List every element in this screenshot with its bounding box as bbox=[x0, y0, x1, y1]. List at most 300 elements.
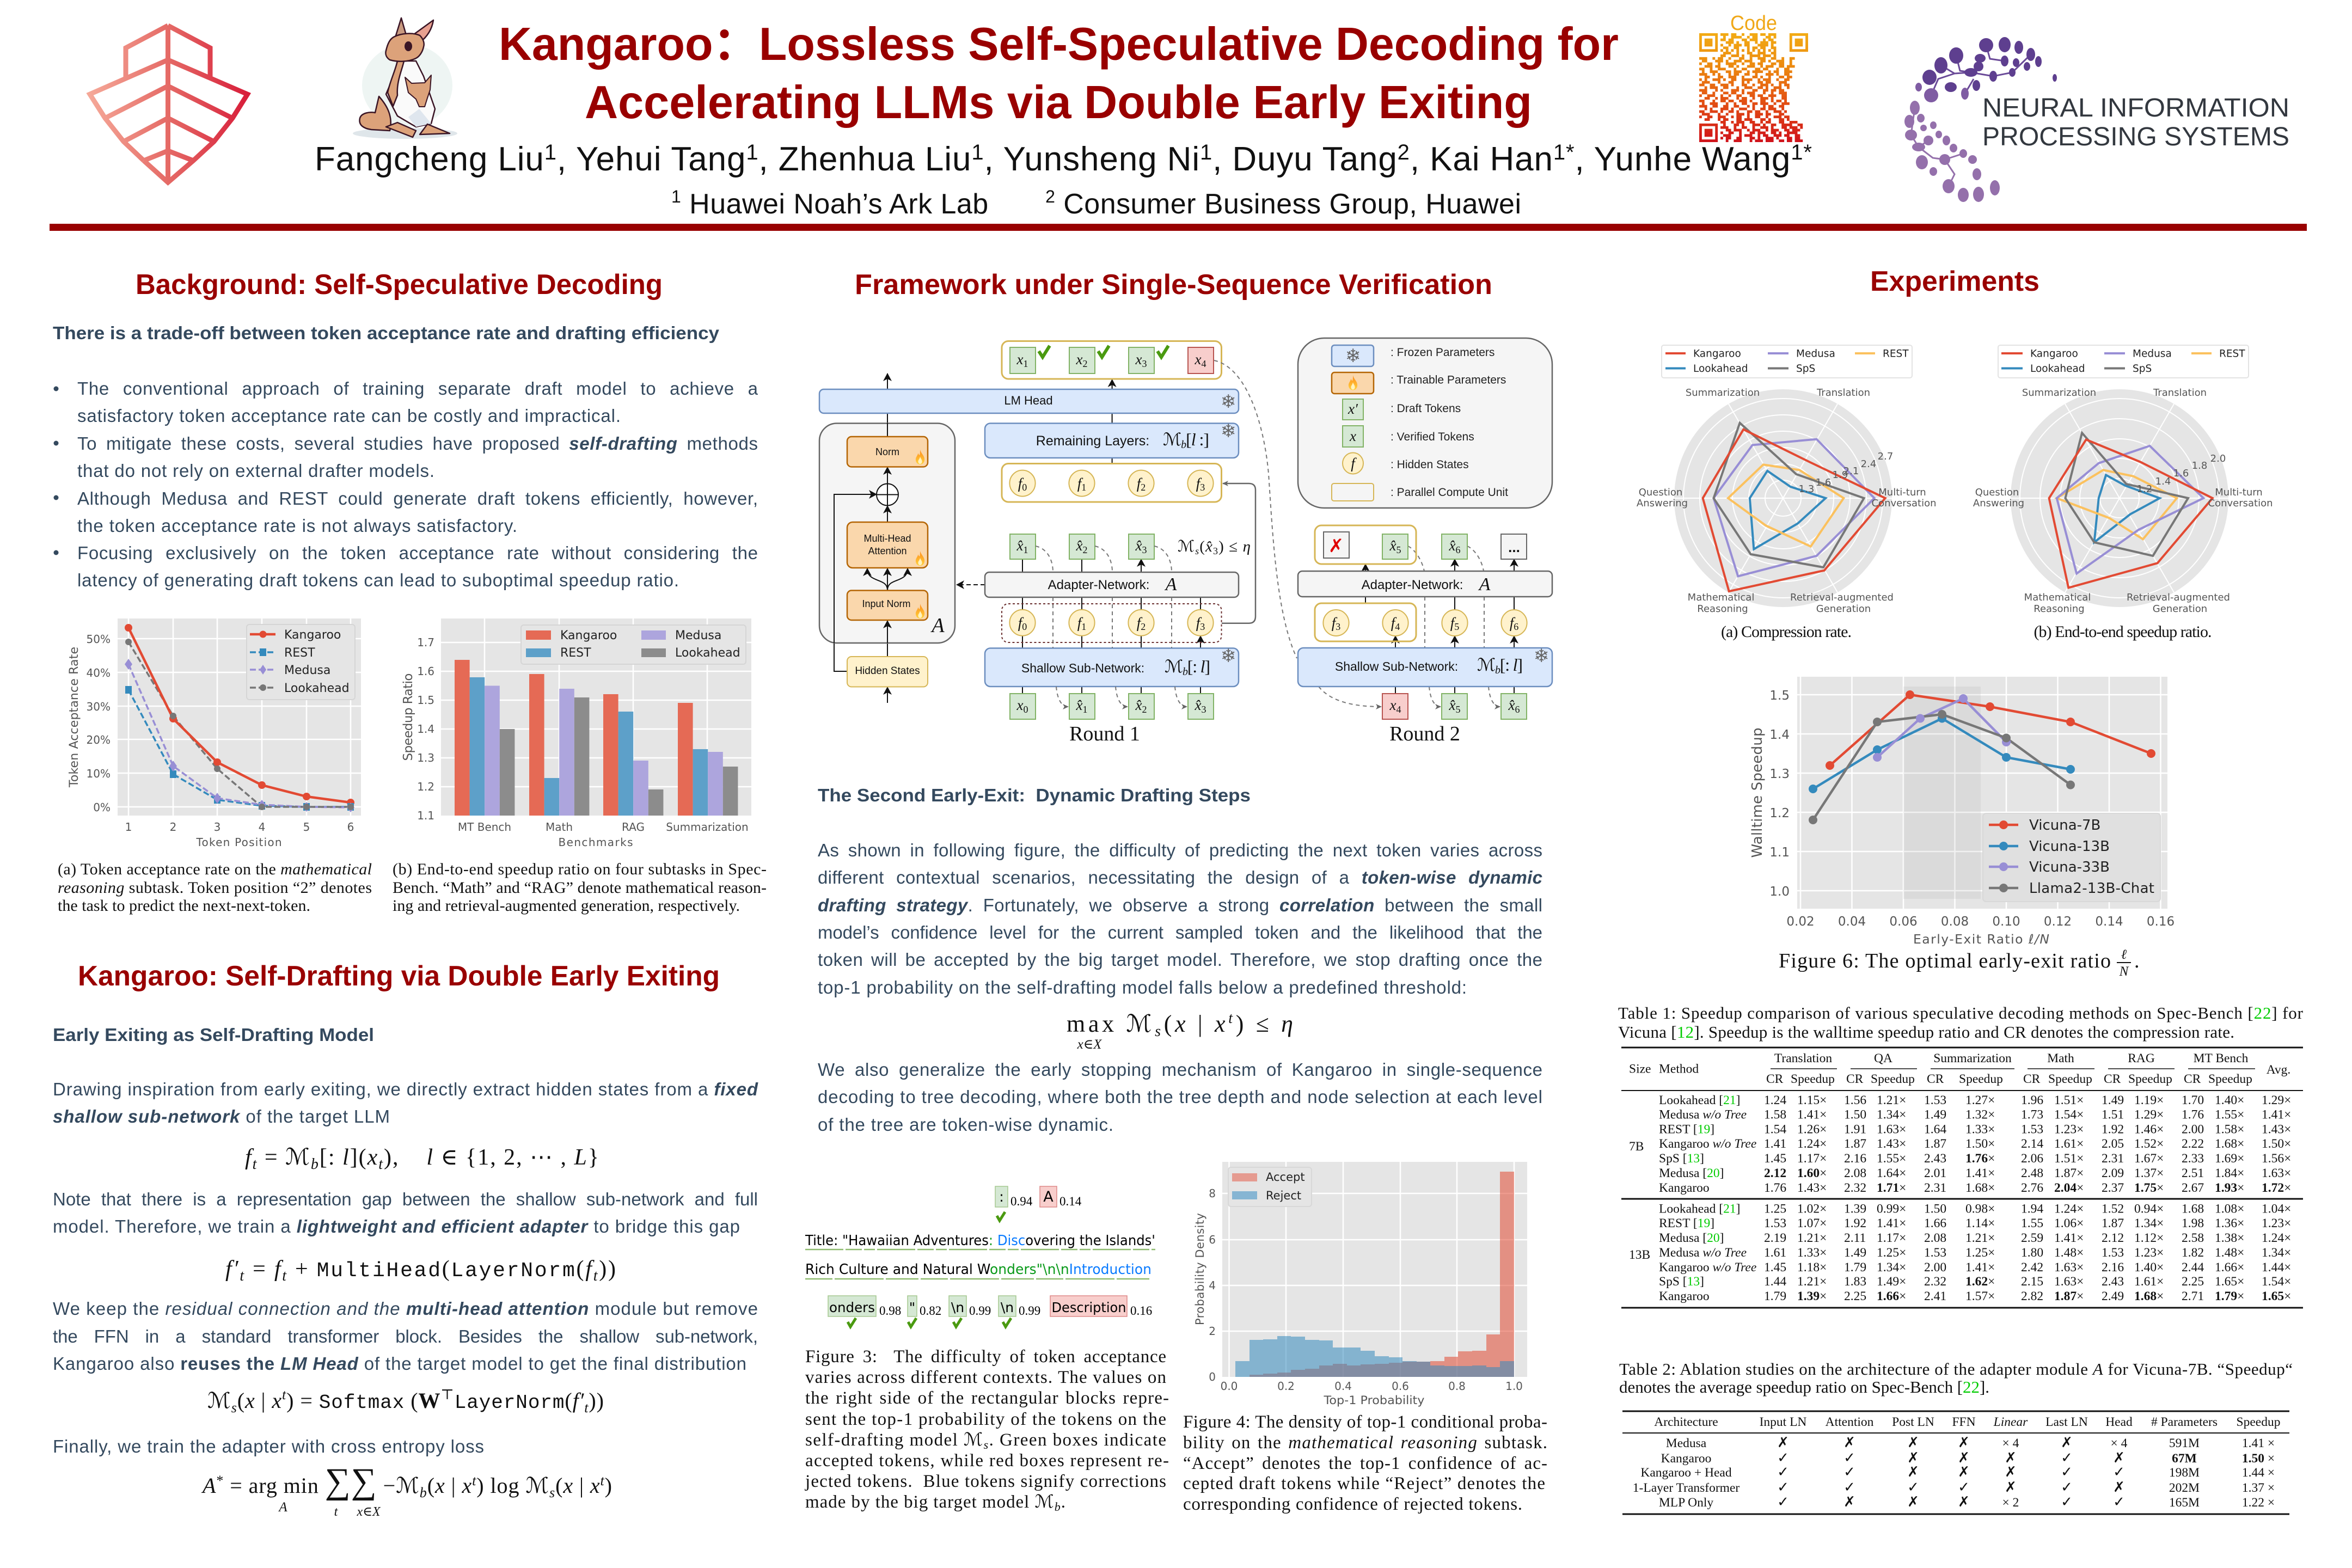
shallow sub-network round 1: ℳ bbox=[1165, 657, 1183, 676]
table 1 rows: 13B: 1.39 bbox=[1844, 1202, 1866, 1216]
equation: final distribution: (f′ bbox=[565, 1388, 584, 1413]
radar chart: speedup ratio: 2.0 bbox=[2210, 453, 2226, 464]
text block: residual connection: Kangaroo also reuses the LM Head of the target model to get the final distribution bbox=[53, 1353, 746, 1374]
equation: shallow features: = ℳ bbox=[258, 1145, 310, 1170]
legend panel: : Hidden States bbox=[1391, 458, 1469, 471]
figure 3: token blocks bbox=[805, 1186, 1155, 1327]
table 1 rows: 13B: 2.43 bbox=[2102, 1275, 2124, 1289]
legend panel: : Frozen Parameters bbox=[1391, 346, 1494, 359]
equation: shallow features: ), bbox=[384, 1145, 425, 1170]
table 1 rows: 7B: 1.76 bbox=[2182, 1107, 2204, 1122]
verified tokens: x bbox=[1136, 351, 1142, 367]
radar chart: compression rate: Translation bbox=[1816, 387, 1870, 399]
NeurIPS wordmark: PROCESSING SYSTEMS bbox=[1982, 122, 2289, 151]
table 1 rows: 13B: Medusa [20] bbox=[1659, 1231, 1724, 1245]
radar chart: compression rate: Mathematical bbox=[1688, 592, 1754, 603]
table 1 rows: 7B: Kangaroo bbox=[1659, 1181, 1710, 1195]
legend: REST bbox=[560, 646, 591, 660]
legend panel: ❄ bbox=[1345, 345, 1361, 367]
hidden states row bottom: 1 bbox=[1081, 621, 1086, 632]
multi-head attention block: Multi-Head bbox=[863, 533, 911, 544]
legend panel: : Verified Tokens bbox=[1391, 431, 1474, 443]
table 1 rows: 13B: 1.48× bbox=[2215, 1246, 2244, 1260]
table 1 rows: 7B: Kangaroo w/o Tree bbox=[1659, 1137, 1756, 1151]
equation: final distribution: ) = bbox=[286, 1388, 318, 1413]
line chart: figure 6: 0.06 bbox=[1889, 915, 1918, 929]
legend panel: x′ bbox=[1347, 401, 1358, 417]
text block: dynamic drafting: drafting strategy. Fortunately, we observe a strong correlation between the small bbox=[818, 895, 1542, 915]
table 1 header: CR bbox=[2104, 1072, 2121, 1086]
verified tokens: x bbox=[1195, 351, 1201, 367]
table 2 rows: ✓ bbox=[1843, 1450, 1855, 1466]
histogram: figure 4 bbox=[1193, 1162, 1527, 1407]
table 2 header: Input LN bbox=[1760, 1415, 1806, 1429]
table 2 rows: ✗ bbox=[1907, 1450, 1919, 1466]
table 1 header: CR bbox=[1846, 1072, 1864, 1086]
table 1 rows: 7B: 2.08 bbox=[1844, 1166, 1866, 1180]
text block: tree decoding: decoding to tree decoding, where both the tree depth and node selection at each level bbox=[818, 1087, 1542, 1107]
equation: adapter: f bbox=[274, 1257, 284, 1282]
bar chart: end-to-end speedup ratio bbox=[401, 618, 751, 849]
verified tokens: x bbox=[1076, 351, 1082, 367]
equation: shallow features: [: bbox=[320, 1145, 341, 1170]
table 1 rows: 7B: 2.00 bbox=[2182, 1123, 2204, 1137]
table 1 rows: 13B: 1.02× bbox=[1797, 1202, 1827, 1216]
legend panel bbox=[1298, 338, 1552, 508]
table 1 rows: 7B: 1.41× bbox=[2262, 1107, 2291, 1122]
table 1 header: CR bbox=[1927, 1072, 1944, 1086]
radar chart: compression rate: Answering bbox=[1637, 498, 1688, 509]
line chart: figure 6: 0.08 bbox=[1941, 915, 1969, 929]
bar chart: end-to-end speedup ratio: Benchmarks bbox=[559, 836, 633, 849]
table 1 rows: 13B: REST [19] bbox=[1659, 1216, 1714, 1230]
bar chart: end-to-end speedup ratio: 1.1 bbox=[417, 809, 434, 822]
line chart: token acceptance rate: 20% bbox=[87, 733, 111, 746]
table 1 rows: 13B: 1.52 bbox=[2102, 1202, 2124, 1216]
table 2 rows: ✗ bbox=[2005, 1450, 2017, 1466]
table 1 rows: 13B: Medusa w/o Tree bbox=[1659, 1246, 1747, 1260]
equation: final distribution: s bbox=[231, 1400, 237, 1416]
histogram: figure 4: 4 bbox=[1209, 1279, 1216, 1292]
table 1 rows: 7B: 1.71× bbox=[1877, 1181, 1906, 1195]
table 1 rows: 13B: 1.87 bbox=[2102, 1216, 2124, 1230]
table 1 header: Speedup bbox=[2208, 1072, 2252, 1086]
equation: cross entropy: t bbox=[334, 1505, 339, 1519]
table 1 rows: 13B: 0.99× bbox=[1877, 1202, 1906, 1216]
table 1 rows: 7B: Lookahead [21] bbox=[1659, 1093, 1740, 1107]
table 1 rows: 13B: 1.82 bbox=[2182, 1246, 2204, 1260]
threshold label: ) ≤ bbox=[1218, 538, 1242, 555]
legend: Lookahead bbox=[1693, 363, 1748, 375]
table 1 rows: 7B: 1.33× bbox=[1965, 1123, 1995, 1137]
table 1 rows: 7B: 1.56 bbox=[1844, 1093, 1866, 1107]
radar chart: compression rate: 1.6 bbox=[1816, 477, 1831, 488]
table 1 rows: 7B: 1.49 bbox=[1924, 1107, 1946, 1122]
table 1 rows: 7B: 2.22 bbox=[2182, 1137, 2204, 1151]
panel: background bbox=[53, 269, 767, 915]
caption: figure 3: the right side of the rectangular blocks repre- bbox=[805, 1388, 1169, 1408]
remaining layers: l :] bbox=[1191, 430, 1209, 449]
histogram: figure 4: 0.0 bbox=[1221, 1380, 1238, 1393]
equation: final distribution: t bbox=[584, 1400, 589, 1416]
equation: cross entropy: t bbox=[601, 1473, 605, 1489]
hidden states row top: f bbox=[1137, 475, 1141, 492]
top token row: : bbox=[999, 1189, 1004, 1205]
table 2 rows: ✗ bbox=[2113, 1450, 2125, 1466]
line chart: figure 6: 1.5 bbox=[1769, 689, 1790, 703]
table 1 rows: 13B: 1.68× bbox=[2134, 1289, 2164, 1303]
hidden states row bottom: 3 bbox=[1200, 621, 1205, 632]
table 1 rows: 7B: SpS [13] bbox=[1659, 1152, 1704, 1166]
histogram: figure 4: 0 bbox=[1209, 1370, 1216, 1383]
table 1 rows: 13B: 2.12 bbox=[2102, 1231, 2124, 1245]
legend: Medusa bbox=[675, 629, 721, 642]
radar chart: speedup ratio: Multi-turn bbox=[2215, 487, 2263, 498]
legend panel: f bbox=[1351, 455, 1357, 471]
round 2 hidden states: 3 bbox=[1336, 621, 1340, 632]
table 1 rows: 13B: 1.14× bbox=[1965, 1216, 1995, 1230]
table 1 rows: 13B: Kangaroo bbox=[1659, 1289, 1710, 1303]
caption: figure 3: made by the big target model ℳ bbox=[805, 1492, 1054, 1512]
table 1 header: Math bbox=[2047, 1051, 2074, 1065]
legend bbox=[1983, 813, 2160, 902]
line chart: figure 6: 1.3 bbox=[1769, 767, 1790, 781]
radar chart: compression rate: Retrieval-augmented bbox=[1790, 592, 1894, 603]
table 1 rows: 7B: 1.52× bbox=[2134, 1137, 2164, 1151]
legend panel: x bbox=[1349, 428, 1356, 444]
text block: tree decoding: We also generalize the early stopping mechanism of Kangaroo in single-sequence bbox=[818, 1059, 1542, 1080]
equation: cross entropy: A bbox=[278, 1500, 287, 1515]
input tokens round 1 bbox=[1010, 694, 1214, 719]
threshold label: η bbox=[1243, 538, 1251, 555]
table 1 rows: 7B: 1.72× bbox=[2262, 1181, 2291, 1195]
table 1 rows: 13B: 2.16 bbox=[2102, 1260, 2124, 1275]
draft tokens row: 2 bbox=[1082, 544, 1087, 555]
table 1 rows: 13B: 1.18× bbox=[1797, 1260, 1827, 1275]
table 1 rows: 13B: 1.53 bbox=[1924, 1246, 1946, 1260]
table 1 rows: 7B: 1.41 bbox=[1764, 1137, 1786, 1151]
table 1 rows: 7B: 1.41× bbox=[1965, 1166, 1995, 1180]
table 2 rows: ✗ bbox=[2061, 1435, 2073, 1451]
generated text lines bbox=[805, 1233, 1155, 1279]
authors: , Yunhe Wang bbox=[1575, 140, 1790, 178]
radar chart: compression rate: Reasoning bbox=[1697, 603, 1748, 615]
caption: figure 6: N bbox=[2119, 964, 2129, 979]
remaining layers bbox=[985, 420, 1239, 458]
table 1 rows: 7B: 1.46× bbox=[2134, 1123, 2164, 1137]
table 1 header bbox=[1629, 1051, 2290, 1086]
legend: Medusa bbox=[1796, 348, 1835, 359]
line chart: token acceptance rate: 4 bbox=[259, 820, 265, 834]
radar chart: speedup ratio: Translation bbox=[2153, 387, 2207, 399]
table 1 rows: 7B: 1.40× bbox=[2215, 1093, 2244, 1107]
table 2 header: FFN bbox=[1952, 1415, 1976, 1429]
table 1 rows: 7B: 2.51 bbox=[2182, 1166, 2204, 1180]
radar chart: speedup ratio: Reasoning bbox=[2033, 603, 2085, 615]
top token row bbox=[995, 1186, 1082, 1221]
table 2 rows: 1.22 × bbox=[2242, 1496, 2275, 1510]
table 1 rows: 7B: 1.76× bbox=[1965, 1152, 1995, 1166]
table 1 rows: 7B: 1.64× bbox=[1877, 1166, 1906, 1180]
radar chart: compression rate: 1.3 bbox=[1799, 483, 1814, 495]
equation: final distribution: ⊤ bbox=[440, 1387, 454, 1402]
radar chart: speedup ratio: 1.8 bbox=[2192, 460, 2207, 471]
table 1 rows: 13B: 1.08× bbox=[2215, 1202, 2244, 1216]
input tokens round 2: 6 bbox=[1515, 704, 1520, 715]
caption: figure 4: corresponding confidence of rejected tokens. bbox=[1183, 1494, 1522, 1514]
legend: Kangaroo bbox=[1693, 348, 1741, 359]
legend: Lookahead bbox=[284, 682, 350, 695]
table 1 rows: 7B: 1.93× bbox=[2215, 1181, 2244, 1195]
line chart: figure 6: 0.12 bbox=[2044, 915, 2072, 929]
table 1 rows: 7B: 2.05 bbox=[2102, 1137, 2124, 1151]
equation: adapter: t bbox=[240, 1267, 244, 1284]
hidden states row bottom: f bbox=[1196, 615, 1200, 631]
shallow sub-network round 2 bbox=[1298, 645, 1552, 687]
table 1 rows: 13B: 2.08 bbox=[1924, 1231, 1946, 1245]
authors: , Yehui Tang bbox=[557, 140, 746, 178]
shallow sub-network round 1 bbox=[985, 645, 1239, 687]
radar chart: speedup ratio: Summarization bbox=[2022, 387, 2096, 399]
text block: bullet list: Although Medusa and REST could generate draft tokens efficiently, however, bbox=[77, 488, 758, 509]
verified tokens: 1 bbox=[1023, 358, 1028, 369]
hidden states input: Hidden States bbox=[855, 665, 920, 677]
table 1 rows: 7B: 2.76 bbox=[2021, 1181, 2043, 1195]
table 2 rows: ✓ bbox=[2061, 1450, 2073, 1466]
table 1 rows: 13B: 1.66× bbox=[1877, 1289, 1906, 1303]
table 2 rows: ✓ bbox=[2113, 1464, 2125, 1480]
equation: final distribution: ℳ bbox=[207, 1388, 231, 1413]
text block: tree decoding bbox=[818, 1059, 1542, 1135]
multi-head attention block bbox=[847, 522, 928, 568]
top token row: 0.14 bbox=[1059, 1195, 1082, 1208]
top token row: A bbox=[1043, 1189, 1054, 1205]
icon: conference leaf logo bbox=[90, 26, 247, 182]
equation: stopping criterion: s bbox=[1155, 1023, 1161, 1040]
table 2 rows bbox=[1633, 1435, 2275, 1510]
table 1 rows: 13B: 2.41 bbox=[1924, 1289, 1946, 1303]
legend: Lookahead bbox=[675, 646, 740, 660]
table 1 rows: 13B: 1.34× bbox=[2262, 1246, 2291, 1260]
line chart: token acceptance rate: 0% bbox=[93, 801, 111, 814]
radar chart: speedup ratio: Question bbox=[1975, 487, 2019, 498]
norm block: Norm bbox=[875, 446, 899, 457]
bottom token row: \n bbox=[1001, 1300, 1014, 1315]
caption: figure b: Bench. “Math” and “RAG” denote mathematical reason- bbox=[393, 879, 767, 897]
shallow sub-network round 2: b bbox=[1495, 664, 1500, 676]
histogram: figure 4: 0.2 bbox=[1277, 1380, 1295, 1393]
legend: REST bbox=[284, 646, 315, 660]
table 2 rows: 1-Layer Transformer bbox=[1633, 1481, 1739, 1495]
radar chart: compression rate: Summarization bbox=[1686, 387, 1760, 399]
equation: adapter: + bbox=[288, 1257, 315, 1282]
table 1 rows: 7B: 1.45 bbox=[1764, 1152, 1786, 1166]
equation: stopping criterion: max ℳ bbox=[1067, 1010, 1152, 1037]
shallow sub-network round 2: ❄ bbox=[1534, 645, 1549, 667]
table 1 rows: 7B: 2.04× bbox=[2054, 1181, 2084, 1195]
title: Kangaroo：Lossless Self-Speculative Decoding for bbox=[499, 19, 1619, 70]
authors: 1* bbox=[1791, 140, 1812, 164]
table 1 rows: 7B: 1.19× bbox=[2134, 1093, 2164, 1107]
equation: final distribution: )) bbox=[589, 1388, 604, 1413]
table 1 rows: 13B: 1.23× bbox=[2262, 1216, 2291, 1230]
table 1 rows: 13B: Kangaroo w/o Tree bbox=[1659, 1260, 1756, 1275]
table 1 rows: 13B: 1.79× bbox=[2215, 1289, 2244, 1303]
table 2 rows: ✓ bbox=[1777, 1464, 1789, 1480]
text block: drawing inspiration: Drawing inspiration from early exiting, we directly extract hidden states from a fixed bbox=[53, 1079, 758, 1099]
table 2 caption bbox=[1619, 1359, 2293, 1396]
legend panel: : Trainable Parameters bbox=[1391, 373, 1506, 387]
table 1 rows: 13B: 1.48× bbox=[2054, 1246, 2084, 1260]
bottom token row: 0.99 bbox=[969, 1304, 991, 1318]
authors: 1 bbox=[971, 140, 984, 164]
table 1 rows: 13B: 2.25 bbox=[2182, 1275, 2204, 1289]
caption: radar b: (b) End-to-end speedup ratio. bbox=[2034, 623, 2212, 641]
equation: adapter: = bbox=[246, 1257, 273, 1282]
NeurIPS wordmark bbox=[1982, 94, 2289, 151]
radar chart: speedup ratio: Conversation bbox=[2208, 498, 2273, 509]
table 2 rows: ✓ bbox=[1843, 1464, 1855, 1480]
round 2 output tokens: x̂ bbox=[1449, 537, 1455, 554]
table 1 rows: 13B: 2.49 bbox=[2102, 1289, 2124, 1303]
table 1 rows: 7B: 1.43× bbox=[1877, 1137, 1906, 1151]
histogram: figure 4: 0.8 bbox=[1448, 1380, 1466, 1393]
caption: figure 6: . bbox=[2134, 950, 2140, 972]
line chart: figure 6 bbox=[1749, 677, 2175, 947]
table 1 rows: 7B: 1.58 bbox=[1764, 1107, 1786, 1122]
table 1 caption: Vicuna [12]. Speedup is the walltime speedup ratio and CR denotes the compression rate. bbox=[1618, 1022, 2234, 1042]
table 2 rows: ✗ bbox=[2005, 1464, 2017, 1480]
table 2 bbox=[1622, 1411, 2289, 1514]
table 2 rows: ✓ bbox=[1777, 1494, 1789, 1510]
equation: adapter: f′ bbox=[225, 1257, 238, 1282]
table 2 rows: ✓ bbox=[1777, 1479, 1789, 1496]
line chart: figure 6: 0.14 bbox=[2095, 915, 2123, 929]
bottom token row: 0.82 bbox=[920, 1304, 941, 1318]
legend bbox=[1998, 345, 2249, 378]
table 2 rows: ✓ bbox=[1958, 1479, 1970, 1496]
radar chart: speedup ratio: Mathematical bbox=[2024, 592, 2091, 603]
table 1 header: CR bbox=[2023, 1072, 2041, 1086]
caption: figure 3: . bbox=[1061, 1492, 1065, 1512]
caption: radar a: (a) Compression rate. bbox=[1721, 623, 1852, 641]
hidden states row bottom: 0 bbox=[1022, 621, 1027, 632]
line chart: token acceptance rate: 6 bbox=[347, 820, 354, 834]
equation: final distribution: t bbox=[282, 1387, 286, 1402]
affiliations: Consumer Business Group, Huawei bbox=[1055, 188, 1521, 220]
equation: stopping criterion bbox=[1067, 1010, 1293, 1052]
table 1 rows: 13B: 1.25× bbox=[1877, 1246, 1906, 1260]
generated text lines: Title: "Hawaiian Adventures: Discovering the Islands' bbox=[805, 1233, 1155, 1249]
table 1 rows: 7B: 1.84× bbox=[2215, 1166, 2244, 1180]
hidden states input bbox=[847, 657, 928, 687]
histogram: figure 4: 6 bbox=[1209, 1233, 1216, 1246]
caption: figure 3: . Green boxes indicate bbox=[989, 1430, 1166, 1450]
table 2 rows: 1.50 × bbox=[2242, 1451, 2275, 1466]
table 1 header: CR bbox=[2184, 1072, 2201, 1086]
table 2 rows: 198M bbox=[2169, 1466, 2200, 1480]
table 1 rows: 13B: Lookahead [21] bbox=[1659, 1202, 1740, 1216]
legend panel: : Draft Tokens bbox=[1391, 402, 1461, 415]
radar chart: speedup ratio: Answering bbox=[1973, 498, 2024, 509]
table 1 rows: 7B: 1.49 bbox=[2102, 1093, 2124, 1107]
table 1 rows: 13B: 1.06× bbox=[2054, 1216, 2084, 1230]
caption: figure 3: varies across different contexts. The values on bbox=[805, 1368, 1166, 1387]
threshold label: ℳ bbox=[1178, 538, 1195, 555]
input tokens round 2: 4 bbox=[1396, 704, 1401, 715]
panel: experiments bbox=[1618, 266, 2304, 1514]
hidden states row bottom: f bbox=[1077, 615, 1081, 631]
hidden states row bottom: f bbox=[1137, 615, 1141, 631]
table 1 rows: 7B: 1.55× bbox=[1877, 1152, 1906, 1166]
table 1 caption bbox=[1618, 1003, 2304, 1042]
text block: representation gap bbox=[53, 1189, 758, 1236]
multi-head attention block: Attention bbox=[868, 546, 907, 556]
table 1 rows: 7B: 1.63× bbox=[1877, 1123, 1906, 1137]
table 1 rows: 7B: 1.41× bbox=[1797, 1107, 1827, 1122]
line chart: token acceptance rate bbox=[68, 618, 361, 849]
table 1 rows: 7B: 1.53 bbox=[1924, 1093, 1946, 1107]
table 1 rows: 7B: 1.70 bbox=[2182, 1093, 2204, 1107]
round 2 hidden states: f bbox=[1510, 615, 1514, 631]
caption: figure 3: accepted tokens, while red boxes represent re- bbox=[805, 1451, 1169, 1471]
authors: 2 bbox=[1398, 140, 1410, 164]
table 1 rows: 13B: 1.34× bbox=[1877, 1260, 1906, 1275]
table 1 rows: 7B: 1.68× bbox=[2215, 1137, 2244, 1151]
caption: figure b: ing and retrieval-augmented generation, respectively. bbox=[393, 897, 740, 915]
text block: bullet list: The conventional approach of training separate draft model to achieve a bbox=[77, 378, 758, 399]
table 1 rows: 13B: 2.82 bbox=[2021, 1289, 2043, 1303]
table 1 rows: 7B: 1.24× bbox=[1797, 1137, 1827, 1151]
caption: figure 6 bbox=[1779, 947, 2140, 979]
LM head: LM Head bbox=[1004, 394, 1053, 407]
remaining layers: [ bbox=[1186, 430, 1192, 449]
equation: final distribution: LayerNorm bbox=[455, 1392, 564, 1414]
authors: , Zhenhua Liu bbox=[759, 140, 971, 178]
heading: background: Background: Self-Speculative Decoding bbox=[136, 269, 663, 301]
table 1 rows: 7B: 2.09 bbox=[2102, 1166, 2124, 1180]
table 1 rows: 7B: 1.87 bbox=[1924, 1137, 1946, 1151]
adapter network round 1 bbox=[985, 572, 1239, 597]
table 1 rows: 13B: 1.21× bbox=[1965, 1231, 1995, 1245]
legend: Medusa bbox=[2133, 348, 2172, 359]
table 1 rows: 13B: 1.21× bbox=[1797, 1231, 1827, 1245]
table 2 rows: ✓ bbox=[2061, 1464, 2073, 1480]
draft tokens row: x̂ bbox=[1136, 537, 1142, 554]
legend: Kangaroo bbox=[284, 628, 341, 642]
hidden states row top: 3 bbox=[1200, 482, 1205, 493]
radar chart: speedup ratio: 1.2 bbox=[2137, 483, 2152, 495]
caption: figure 3: sent the top-1 probability of the tokens on the bbox=[805, 1410, 1166, 1429]
table 1 rows: 7B: 1.23× bbox=[2054, 1123, 2084, 1137]
icon: NeurIPS dot logo bbox=[1904, 37, 2057, 202]
line chart: token acceptance rate: 10% bbox=[87, 767, 111, 780]
round 2 hidden states: f bbox=[1450, 615, 1454, 631]
text block: representation gap: Note that there is a representation gap between the shallow sub-network and full bbox=[53, 1189, 758, 1209]
table 1 header: QA bbox=[1874, 1051, 1892, 1065]
input tokens round 1: x̂ bbox=[1136, 697, 1142, 713]
table 1 rows: 13B: 2.25 bbox=[1844, 1289, 1866, 1303]
table 1 rows: 7B: 1.24 bbox=[1764, 1093, 1786, 1107]
subheading: second early exit: The Second Early-Exit: Dynamic Drafting Steps bbox=[818, 785, 1251, 805]
table 1 rows: 7B: 1.27× bbox=[1965, 1093, 1995, 1107]
affiliations: Huawei Noah’s Ark Lab bbox=[681, 188, 1045, 220]
equation: adapter: t bbox=[282, 1267, 287, 1284]
verified tokens: 3 bbox=[1142, 358, 1147, 369]
table 1 rows: 7B: 1.26× bbox=[1797, 1123, 1827, 1137]
table 2 caption: denotes the average speedup ratio on Spec-Bench [22]. bbox=[1619, 1377, 1989, 1396]
table 2 caption: Table 2: Ablation studies on the architecture of the adapter module A for Vicuna-7B. “Speedup“ bbox=[1619, 1359, 2293, 1379]
